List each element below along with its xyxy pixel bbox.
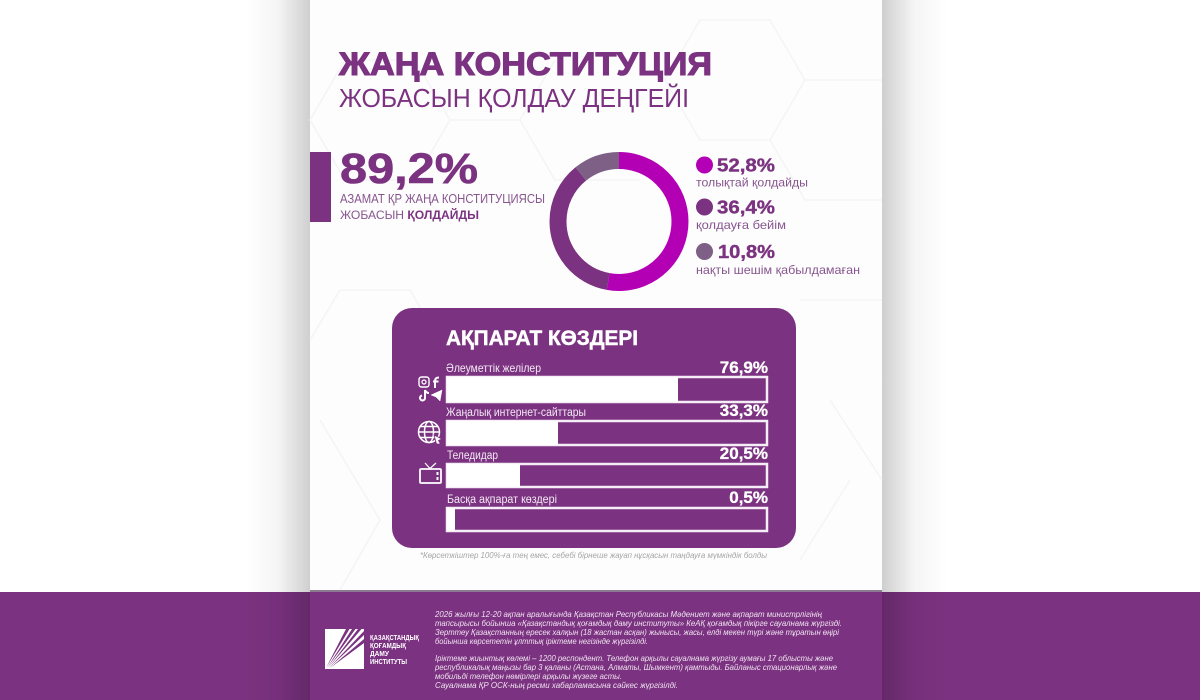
headline statistic: ЖОБАСЫН ҚОЛДАЙДЫ [340,207,479,222]
footer band [0,592,1200,700]
legend [696,156,860,277]
donut chart [558,160,680,282]
bar: other sources [447,488,768,531]
bar: television: Теледидар [447,450,498,462]
panel: poster background [310,0,882,592]
methodology text: тапсырысы бойынша «Қазақстандық қоғамдық даму институты» КеАҚ қоғамдық пікірге сауалнама жүргізді. [435,618,842,628]
title: ЖОБАСЫН ҚОЛДАУ ДЕҢГЕЙІ [339,83,689,113]
legend item: inclined to support [696,198,786,232]
legend item: undecided: 10,8% [718,242,775,262]
bar: news websites: 33,3% [720,401,768,420]
methodology text: мобильді телефон нөмірлері арқылы жүзеге асты. [435,671,622,681]
bar: other sources: 0,5% [729,488,768,507]
legend item: undecided: нақты шешім қабылдамаған [696,263,860,277]
bar: social networks: 76,9% [720,358,768,377]
footnote: *Көрсеткіштер 100%-ға тең емес, себебі бірнеше жауап нұсқасын таңдауға мүмкіндік болды [420,551,767,560]
panel: information sources [392,308,796,548]
logo text: ДАМУ [370,649,389,658]
icon: globe with cursor [418,422,442,444]
title: ЖАҢА КОНСТИТУЦИЯ [338,46,712,82]
methodology text: Іріктеме жиынтық көлемі – 1200 респондент. Телефон арқылы сауалнама жүргізу аумағы 17 облысты және [435,653,833,663]
panel heading: АҚПАРАТ КӨЗДЕРІ [446,327,638,350]
footer panel [310,592,882,700]
methodology text: бойынша көрсететін ұлттық іріктеме негізінде жүргізілді. [435,636,648,646]
logo text: ИНСТИТУТЫ [370,657,407,666]
bar: television [447,444,768,487]
title [338,46,712,113]
methodology text: 2026 жылғы 12-20 ақпан аралығында Қазақстан Республикасы Мәдениет және ақпарат министрлігінің [434,609,822,619]
bar: other sources: Басқа ақпарат көздері [447,494,557,506]
bar: television: 20,5% [720,444,768,463]
icon: social networks [419,377,442,401]
legend item: inclined to support: 36,4% [717,198,775,218]
legend item: fully support: 52,8% [717,156,775,176]
bar: news websites [446,401,768,445]
logo text: ҚОҒАМДЫҚ [370,641,406,650]
methodology text [434,609,842,690]
legend item: inclined to support: қолдауға бейім [696,218,786,232]
methodology text: Зерттеу Қазақстанның ересек халқын (18 жастан асқан) жынысы, жасы, елді мекен түрі және тұратын өңірі [435,627,840,637]
logo [325,629,419,669]
accent bar [310,152,331,222]
methodology text: республикалық маңызы бар 3 қаланы (Астана, Алматы, Шымкент) қамтыды. Байланыс стационарлық және [434,662,837,672]
logo text: ҚАЗАҚСТАНДЫҚ [370,633,419,642]
logo text [370,633,419,666]
bar: news websites: Жаңалық интернет-сайттары [446,407,586,419]
methodology text: Сауалнама ҚР ОСК-ның ресми хабарламасына сәйкес жүргізілді. [435,680,678,690]
logo mark [325,629,364,669]
legend item: undecided [696,242,860,277]
legend item: fully support [696,156,808,190]
icon: television [420,463,441,483]
bar: social networks [446,358,768,402]
bar: social networks: Әлеуметтік желілер [446,363,541,375]
headline statistic: 89,2% [340,145,478,193]
headline statistic: АЗАМАТ ҚР ЖАҢА КОНСТИТУЦИЯСЫ [340,192,545,206]
legend item: fully support: толықтай қолдайды [696,176,808,190]
headline statistic [340,145,545,222]
